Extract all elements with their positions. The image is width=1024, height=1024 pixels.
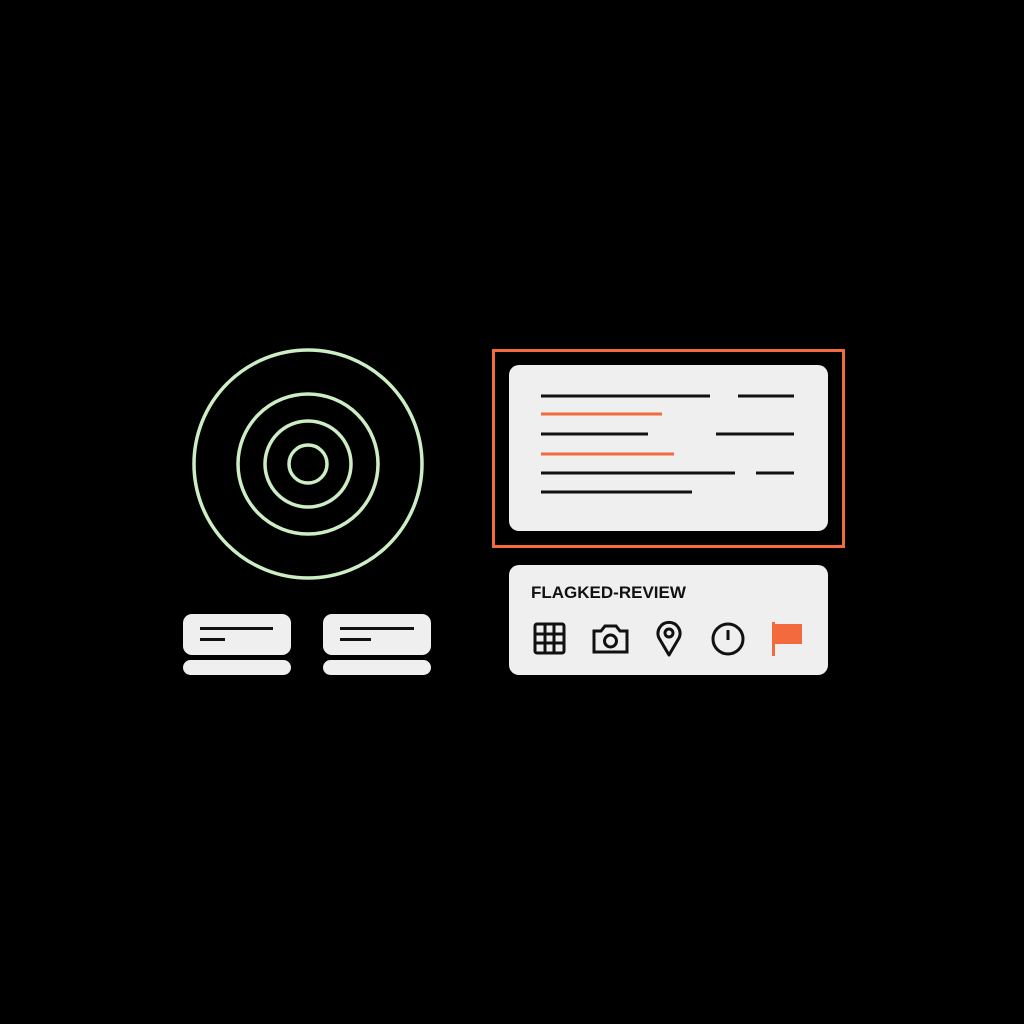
card: left summary card 2 bbox=[323, 614, 431, 675]
icon: orange flag bbox=[772, 622, 802, 656]
label: FLAGKED-REVIEW: FLAGKED-REVIEW bbox=[531, 583, 687, 602]
icon: camera bbox=[594, 626, 627, 652]
icon: concentric target circles bbox=[194, 350, 422, 578]
icon: clock/power bbox=[713, 624, 743, 654]
icon: grid bbox=[535, 624, 564, 653]
panel: highlighted document frame bbox=[494, 350, 844, 546]
card: left summary card 1 bbox=[183, 614, 291, 675]
icon: location pin bbox=[658, 622, 680, 655]
panel: flagged-review card bbox=[509, 565, 828, 675]
